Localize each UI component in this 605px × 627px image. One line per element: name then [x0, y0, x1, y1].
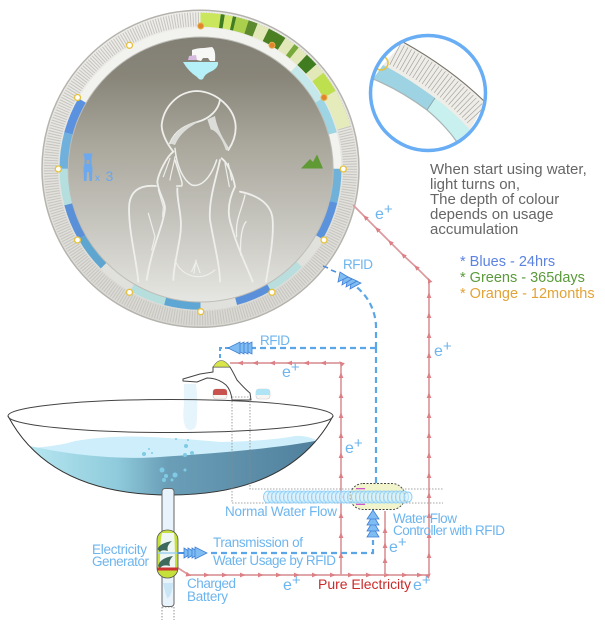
labels: RFID [343, 257, 373, 272]
mirror surface [68, 37, 333, 302]
inner colour band [64, 32, 337, 305]
labels: Pure Electricity [318, 576, 411, 592]
icon: person count [84, 154, 114, 184]
basin rim [8, 400, 333, 432]
basin [8, 360, 333, 500]
icon: person count: x [95, 173, 100, 184]
controller magenta marks [356, 489, 365, 504]
water pipes [232, 397, 443, 503]
icon: person count: 3 [106, 168, 114, 184]
lens frame [370, 36, 486, 150]
explanation text: accumulation [430, 221, 518, 238]
orange month markers [198, 23, 327, 100]
e+ labels: + [384, 201, 393, 218]
legend [460, 254, 595, 302]
arrow cluster up [367, 510, 379, 537]
explanation text: depends on usage [430, 206, 553, 223]
rfid signal: usage transmission [178, 510, 379, 559]
faucet stream [183, 384, 197, 430]
labels: Water Usage by RFID [213, 553, 336, 568]
labels: Transmission of [213, 535, 303, 550]
e+ labels: e [345, 440, 354, 457]
icon: green mountain [301, 154, 323, 168]
e+ labels: e [389, 539, 398, 556]
legend: * Orange - 12months [460, 286, 595, 302]
rfid signal: upper to mirror [323, 266, 376, 483]
line to mirror [178, 205, 429, 575]
bubbles [142, 438, 194, 482]
mirror: circular usage ring [42, 10, 359, 327]
arrow cluster to faucet [228, 342, 252, 354]
e+ labels: e [434, 343, 443, 360]
turbines [158, 541, 172, 552]
arrow cluster to mirror [338, 272, 361, 289]
labels: Generator [92, 554, 150, 569]
green year stripes [52, 20, 350, 318]
legend: * Blues - 24hrs [460, 254, 555, 270]
e+ labels: e [283, 577, 292, 594]
electricity generator capsule [157, 530, 178, 578]
faucet [183, 367, 251, 400]
drain pipe [157, 488, 178, 620]
e+ labels: + [292, 572, 301, 589]
battery bar [158, 568, 178, 570]
e+ labels: e [375, 206, 384, 223]
e+ labels: e [413, 577, 422, 594]
lens ring content [373, 42, 485, 142]
labels: Normal Water Flow [225, 504, 337, 519]
zoom lens detail [370, 36, 486, 150]
labels: Water Flow [393, 511, 457, 526]
explanation text: The depth of colour [430, 191, 559, 208]
basin outline [8, 416, 333, 495]
explanation text: When start using water, [430, 161, 587, 178]
icon: polar bear on ice [183, 47, 218, 80]
labels [92, 257, 505, 604]
e+ labels: + [354, 435, 363, 452]
normal water flow coil [264, 491, 352, 503]
explanation text: light turns on, [430, 176, 520, 193]
water flow controller capsule [350, 484, 405, 510]
water body [30, 440, 316, 494]
e+ labels: + [398, 534, 407, 551]
line to faucet [230, 363, 341, 575]
woman line drawing [129, 91, 273, 282]
e+ labels: + [443, 338, 452, 355]
e+ labels [282, 201, 452, 594]
cold water button [256, 389, 270, 399]
ring tick marks [51, 19, 350, 318]
controller coil [348, 491, 412, 503]
line to controller [384, 511, 386, 575]
yellow month markers [55, 42, 346, 315]
rfid signal: to faucet [220, 342, 376, 358]
ring outer rim [42, 10, 359, 327]
e+ labels: + [422, 572, 431, 589]
faucet sensor dome [213, 360, 230, 367]
hot water button [213, 389, 227, 399]
e+ labels: e [282, 364, 291, 381]
e+ labels: + [291, 359, 300, 376]
legend: * Greens - 365days [460, 270, 585, 286]
arrow cluster right [184, 547, 207, 559]
electricity lines [178, 205, 429, 575]
labels: Battery [187, 589, 228, 604]
basin water [30, 436, 320, 500]
labels: RFID [260, 333, 290, 348]
labels: Charged [187, 576, 236, 591]
water surface [38, 436, 316, 458]
labels: Electricity [92, 542, 147, 557]
labels: Controller with RFID [393, 523, 505, 538]
